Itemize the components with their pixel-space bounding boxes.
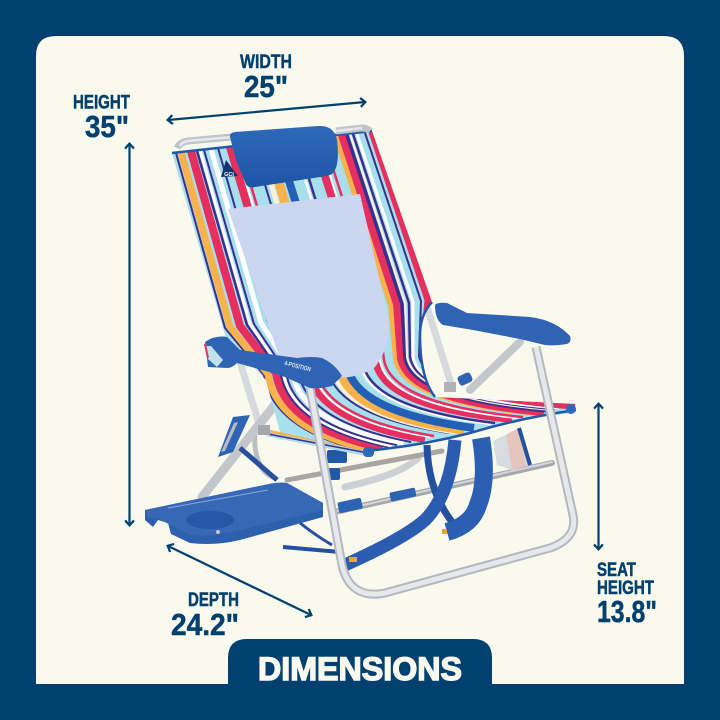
heading tab: dimensions: DIMENSIONS: [258, 651, 462, 687]
logo badge: GCI: [224, 172, 234, 178]
seat rod: [268, 431, 368, 453]
fabric piping: [172, 131, 576, 451]
under-seat pocket: [493, 428, 530, 470]
label: height: [73, 92, 130, 144]
seat front rod end: [363, 404, 576, 457]
lock clip: [444, 372, 473, 392]
label: depth: DEPTH: [188, 590, 239, 611]
striped fabric: [172, 131, 576, 450]
front frame: [310, 347, 574, 594]
label: depth: 24.2": [171, 608, 239, 642]
label: width: 25": [244, 70, 288, 104]
chair illustration: [145, 120, 590, 594]
cup holder: [186, 511, 234, 529]
label: height: 35": [85, 110, 129, 144]
label: height: HEIGHT: [73, 92, 130, 114]
right armrest: [435, 303, 571, 345]
hinge: [258, 425, 270, 435]
arrow: height: [128, 144, 131, 525]
backpack straps: [240, 438, 484, 565]
label: width: WIDTH: [240, 51, 292, 73]
pillow: [230, 126, 338, 187]
logo badge: [221, 160, 238, 178]
label: seat height: [597, 559, 657, 629]
heading tab: dimensions: [228, 639, 492, 687]
rod clips: [337, 487, 417, 513]
side clip: [218, 415, 250, 457]
rear frame and rods: [202, 310, 552, 512]
label: width: [240, 51, 292, 104]
label: depth: [171, 590, 239, 642]
label: seat height: HEIGHT: [597, 577, 654, 599]
mesh panel: [228, 194, 389, 378]
under-seat clips: [327, 450, 347, 480]
left armrest: [205, 337, 342, 388]
label: seat height: SEAT: [597, 559, 636, 581]
arrow: seat height: [597, 404, 600, 549]
arrow: width: [168, 102, 365, 120]
arrow: depth: [168, 546, 311, 615]
top frame tube: [177, 128, 370, 148]
side table: [145, 483, 323, 544]
label: seat height: 13.8": [597, 595, 657, 629]
left armrest: 4-POSITION: [284, 360, 312, 374]
